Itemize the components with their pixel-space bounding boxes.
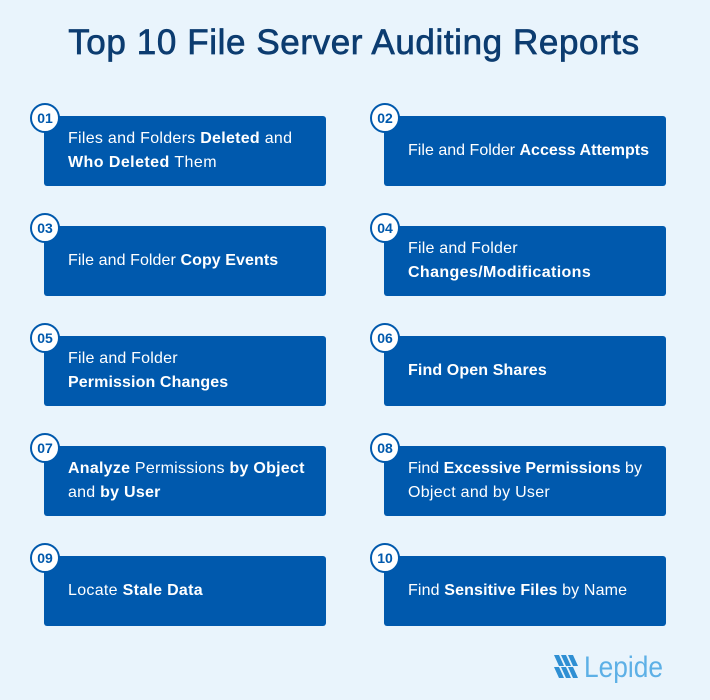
card 05 — [44, 336, 326, 406]
card 03 — [44, 226, 326, 296]
card 08 — [384, 446, 666, 516]
card 01: Files and Folders Deleted and — [68, 130, 292, 147]
card 06 — [384, 336, 666, 406]
card 02: File and Folder Access Attempts — [408, 142, 649, 159]
panel: report 09 — [30, 543, 326, 626]
card 05: Permission Changes — [68, 374, 228, 391]
panel: report 07 — [30, 433, 326, 516]
card 10 — [384, 556, 666, 626]
badge 02: 02 — [377, 110, 393, 126]
card 08: Object and by User — [408, 484, 550, 501]
card 03: File and Folder Copy Events — [68, 252, 278, 269]
title: Top 10 File Server Auditing Reports — [68, 23, 640, 62]
badge 03: 03 — [37, 220, 53, 236]
badge 10: 10 — [377, 550, 393, 566]
card 04 — [384, 226, 666, 296]
badge 05: 05 — [37, 330, 53, 346]
panel: report 08 — [370, 433, 666, 516]
card 08: Find Excessive Permissions by — [408, 460, 642, 477]
card 10: Find Sensitive Files by Name — [408, 582, 627, 599]
panel: report 02 — [370, 103, 666, 186]
logo: Lepide — [554, 651, 663, 684]
badge 07 — [30, 433, 60, 463]
card 06: Find Open Shares — [408, 362, 547, 379]
card 07: and by User — [68, 484, 161, 501]
badge 03 — [30, 213, 60, 243]
panel: report 06 — [370, 323, 666, 406]
panel: report 10 — [370, 543, 666, 626]
badge 04 — [370, 213, 400, 243]
card 05: File and Folder — [68, 350, 178, 367]
badge 06: 06 — [377, 330, 393, 346]
card 09: Locate Stale Data — [68, 582, 203, 599]
panel: report 05 — [30, 323, 326, 406]
badge 04: 04 — [377, 220, 393, 236]
badge 09 — [30, 543, 60, 573]
card 01 — [44, 116, 326, 186]
badge 01 — [30, 103, 60, 133]
badge 01: 01 — [37, 110, 53, 126]
badge 08: 08 — [377, 440, 393, 456]
panel: report 01 — [30, 103, 326, 186]
badge 06 — [370, 323, 400, 353]
card 01: Who Deleted Them — [68, 154, 217, 171]
badge 07: 07 — [37, 440, 53, 456]
icon: logo stripes — [554, 655, 578, 678]
badge 05 — [30, 323, 60, 353]
panel: report 04 — [370, 213, 666, 296]
card 04: File and Folder — [408, 240, 518, 257]
badge 10 — [370, 543, 400, 573]
badge 09: 09 — [37, 550, 53, 566]
badge 02 — [370, 103, 400, 133]
card 09 — [44, 556, 326, 626]
card 07: Analyze Permissions by Object — [68, 460, 305, 477]
panel: report 03 — [30, 213, 326, 296]
card 07 — [44, 446, 326, 516]
card 02 — [384, 116, 666, 186]
badge 08 — [370, 433, 400, 463]
card 04: Changes/Modifications — [408, 264, 591, 281]
